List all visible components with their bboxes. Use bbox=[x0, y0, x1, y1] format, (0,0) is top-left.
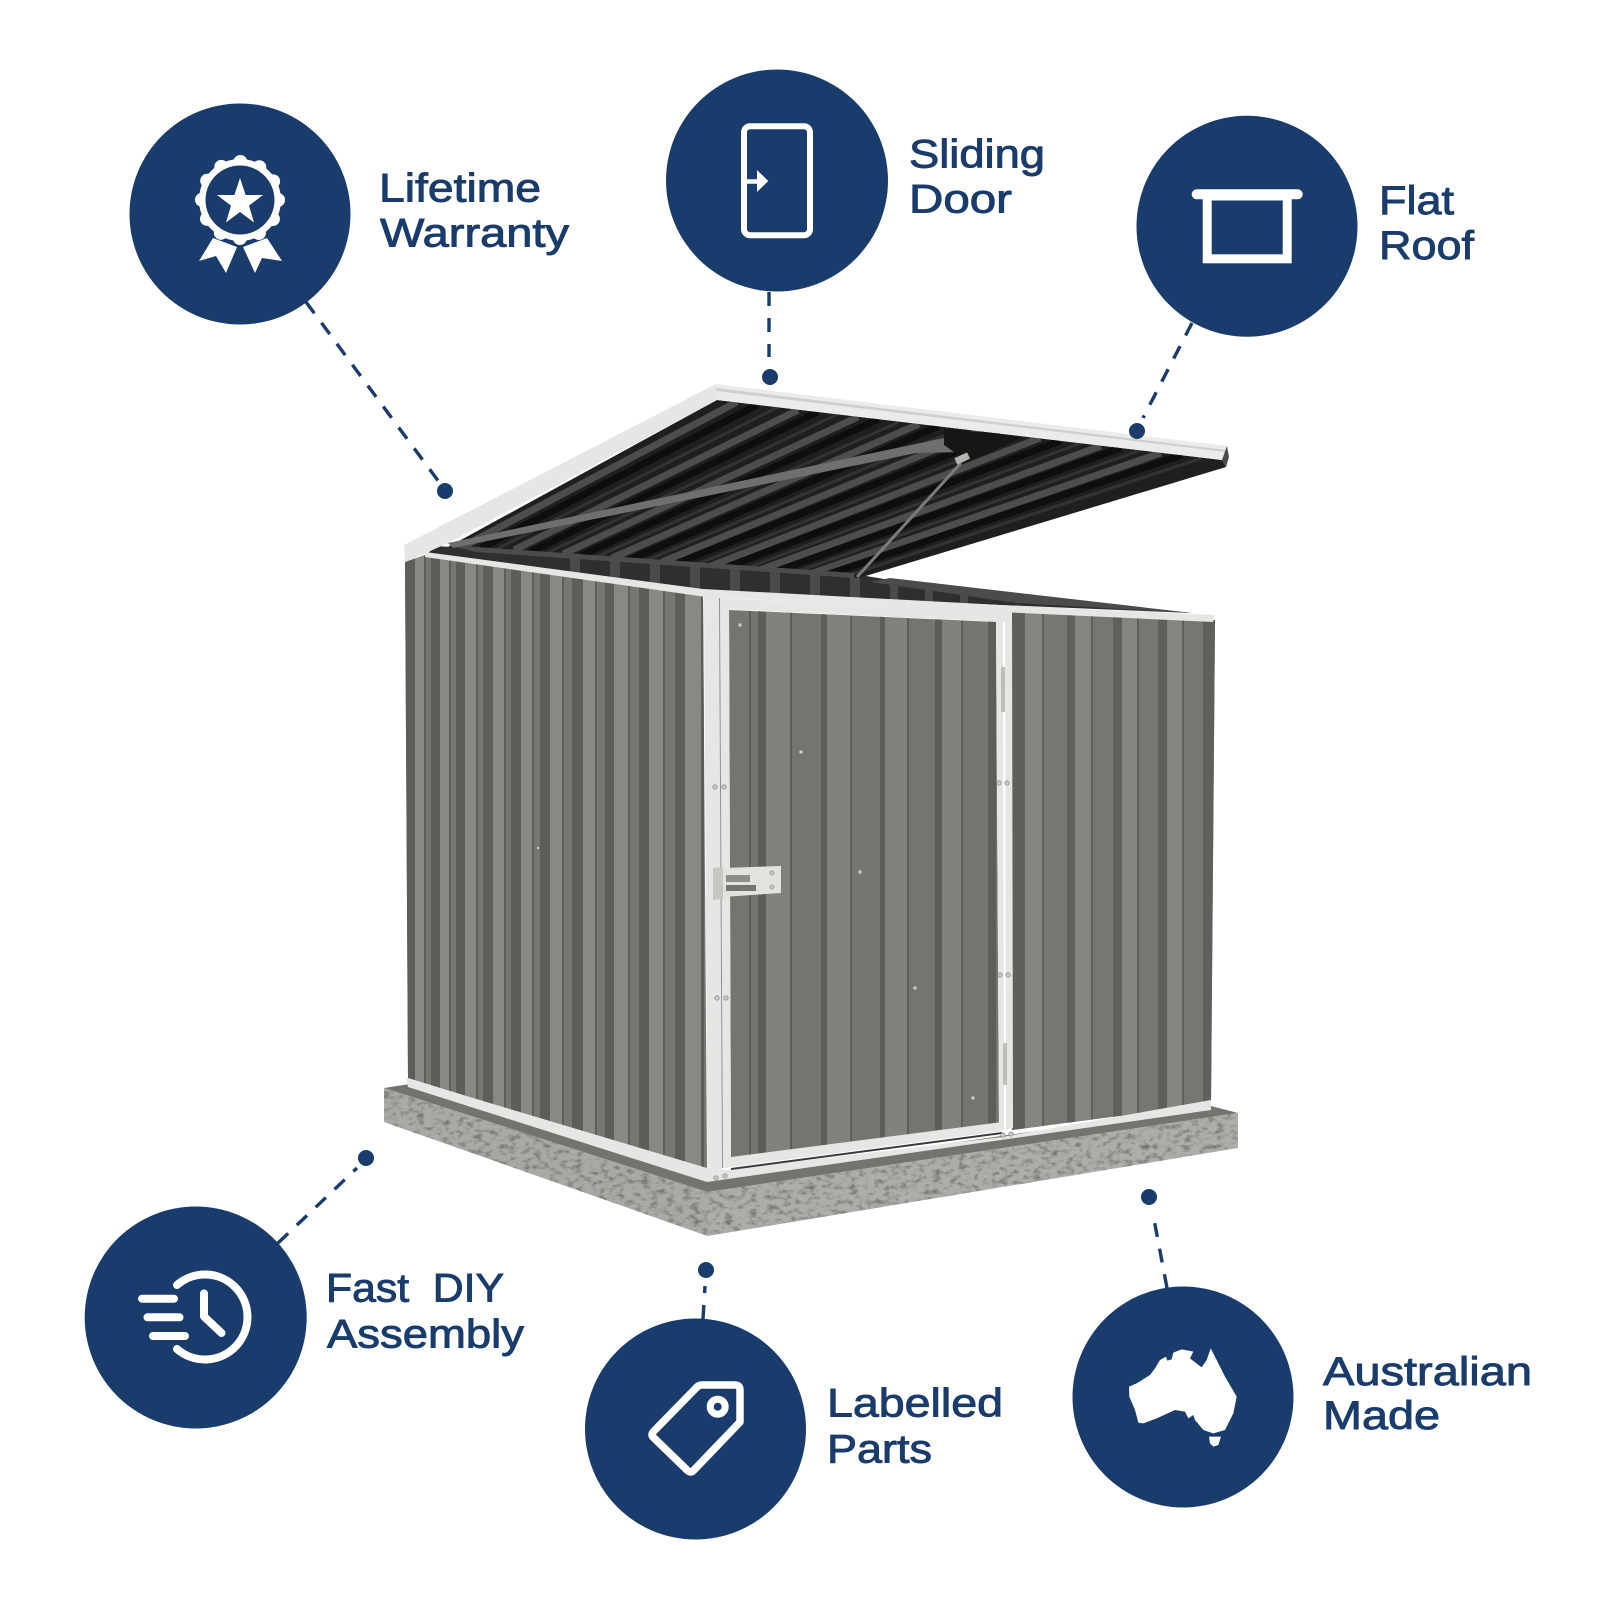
roof rail bottom edge bbox=[448, 545, 854, 578]
label: Labelled Parts bbox=[827, 1382, 1003, 1472]
latch plate bbox=[713, 866, 781, 900]
badge: labelled parts bbox=[585, 1318, 806, 1540]
label: Sliding Door: Sliding bbox=[909, 132, 1045, 176]
label: Fast DIY Assembly: Assembly bbox=[327, 1312, 524, 1356]
roof side flashing bbox=[404, 384, 717, 562]
callout connector: fast DIY assembly bbox=[278, 1150, 374, 1243]
label: Lifetime Warranty: Lifetime bbox=[379, 166, 541, 210]
badge: fast DIY assembly bbox=[85, 1206, 307, 1428]
roof front fascia bbox=[716, 384, 1229, 467]
right wall corrugated panel bbox=[1010, 600, 1220, 1140]
label: Australian Made bbox=[1323, 1350, 1532, 1438]
label: Australian Made: Made bbox=[1323, 1394, 1440, 1438]
left wall corrugated panel bbox=[400, 540, 710, 1190]
label: Fast DIY Assembly bbox=[326, 1266, 524, 1356]
door panel bbox=[725, 600, 1000, 1170]
label: Labelled Parts: Labelled bbox=[827, 1382, 1003, 1426]
badge: lifetime warranty bbox=[130, 104, 350, 324]
label: Australian Made: Australian bbox=[1323, 1350, 1532, 1394]
icon: rosette with star bbox=[199, 159, 282, 273]
label: Flat Roof: Flat bbox=[1379, 179, 1454, 223]
roof support strut bbox=[857, 452, 970, 577]
callout connector: flat roof bbox=[1129, 323, 1192, 439]
label: Lifetime Warranty bbox=[379, 166, 569, 256]
icon: fast clock bbox=[142, 1274, 247, 1360]
illustration: garden shed with open roof bbox=[384, 384, 1240, 1236]
roof bracket bbox=[944, 428, 1023, 462]
label: Labelled Parts: Parts bbox=[827, 1428, 932, 1472]
roof underside with ribs bbox=[440, 395, 1240, 585]
badge: sliding door bbox=[666, 70, 888, 292]
icon: door with arrow bbox=[744, 126, 810, 235]
shed interior back wall bbox=[428, 546, 1192, 613]
callout connector: labelled parts bbox=[698, 1262, 714, 1319]
icon: price tag bbox=[652, 1385, 740, 1472]
label: Fast DIY Assembly: Fast DIY bbox=[326, 1266, 504, 1310]
white frame: posts, header and sills bbox=[406, 552, 1215, 1182]
callout connector: lifetime warranty bbox=[306, 302, 453, 499]
icon: flat roof outline bbox=[1192, 189, 1303, 259]
screws and hinges bbox=[713, 623, 1013, 1180]
label: Flat Roof: Roof bbox=[1379, 224, 1475, 268]
callout connector: australian made bbox=[1141, 1189, 1167, 1288]
badge: flat roof bbox=[1136, 116, 1358, 337]
badge: australian made bbox=[1072, 1286, 1294, 1508]
roof cross brace bbox=[448, 438, 975, 548]
icon: map of Australia bbox=[1129, 1348, 1237, 1447]
concrete slab bbox=[384, 1084, 1238, 1236]
label: Sliding Door: Door bbox=[909, 178, 1012, 222]
label: Flat Roof bbox=[1379, 179, 1475, 268]
label: Sliding Door bbox=[909, 132, 1045, 222]
callout connector: sliding door bbox=[762, 292, 778, 385]
label: Lifetime Warranty: Warranty bbox=[380, 212, 569, 256]
